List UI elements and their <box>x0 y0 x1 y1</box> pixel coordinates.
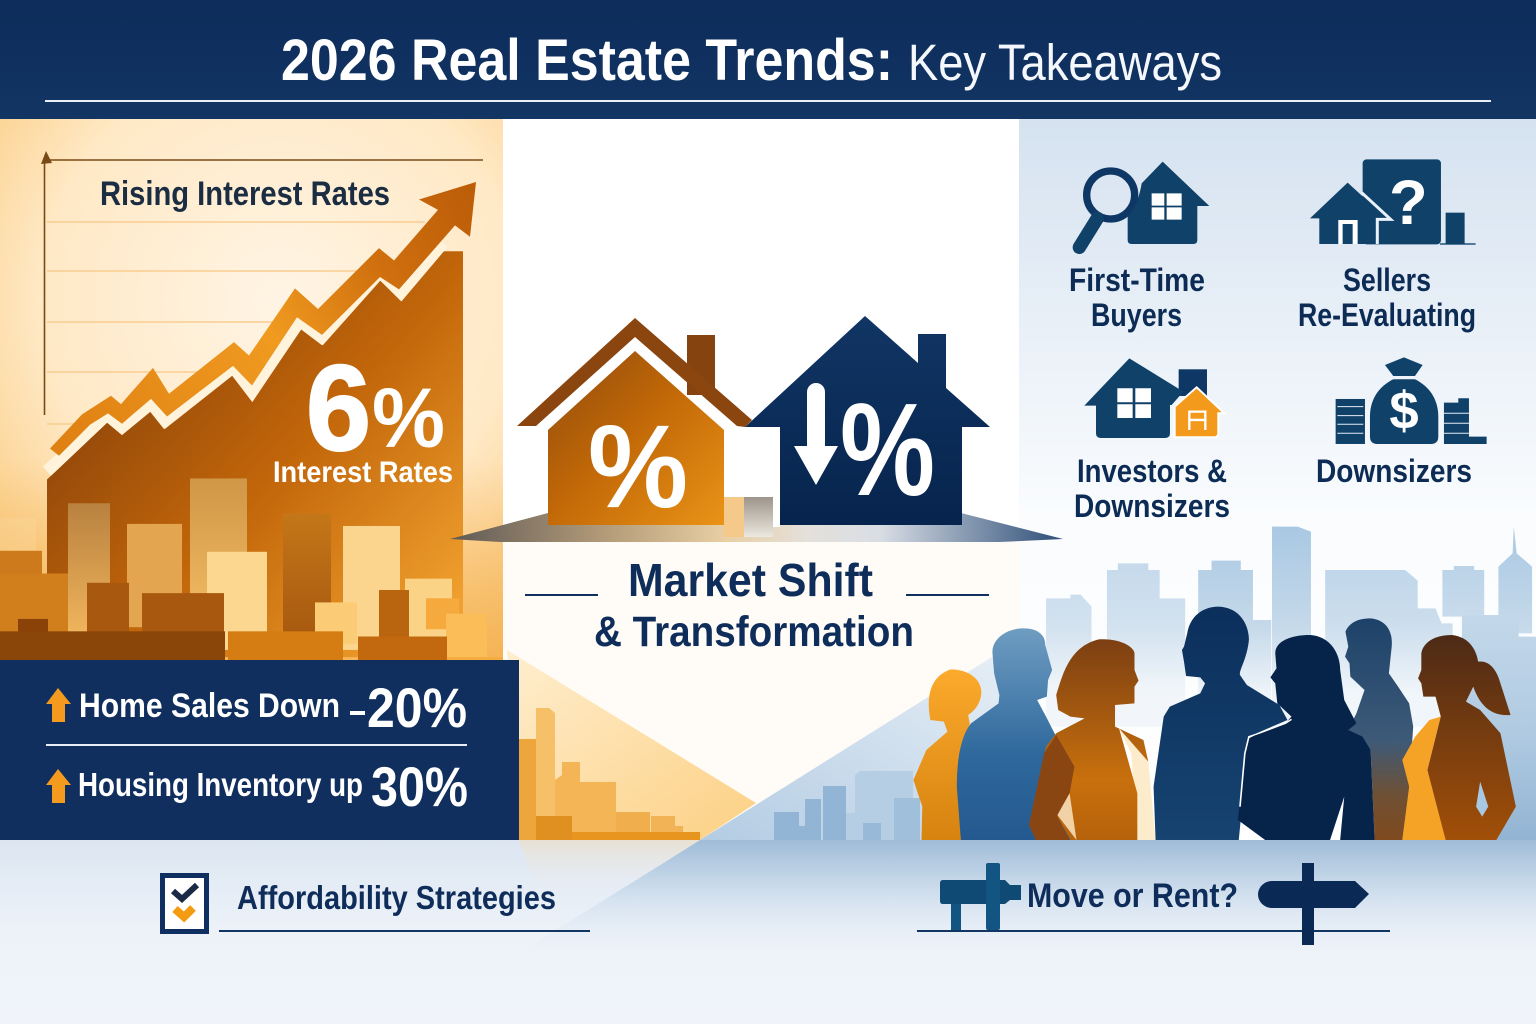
icon: first-time buyers <box>1079 162 1209 247</box>
label: sellers re-evaluating: Re-Evaluating <box>1298 297 1476 333</box>
label: first-time buyers: Buyers <box>1091 297 1182 333</box>
move or rent callout <box>917 863 1390 945</box>
bottom band: warm reflection <box>519 840 700 897</box>
affordability strategies callout: Affordability Strategies <box>237 879 556 916</box>
title text: 2026 Real Estate Trends: <box>281 28 893 93</box>
person: navy woman <box>1238 635 1375 840</box>
house: navy with down arrow and percent <box>745 316 990 525</box>
audience icons and labels <box>1069 159 1487 524</box>
stat: 6% interest rates: % <box>372 371 445 465</box>
heading: market shift and transformation: Market Shift <box>628 554 873 606</box>
person: navy man <box>1154 607 1287 840</box>
affordability strategies callout <box>162 876 590 932</box>
label: first-time buyers <box>1069 262 1205 333</box>
icon: sellers re-evaluating <box>1310 159 1476 245</box>
label: sellers re-evaluating <box>1298 262 1476 333</box>
ground shadow <box>450 513 1063 542</box>
house: orange with percent <box>517 318 752 533</box>
panel: right audience background <box>1019 119 1536 840</box>
heading: market shift and transformation <box>525 554 989 656</box>
subtitle text: Key Takeaways <box>908 34 1222 91</box>
illustration: skyline and people <box>913 527 1536 840</box>
stat row: housing inventory up <box>46 755 468 818</box>
label: investors and downsizers: Downsizers <box>1074 488 1230 524</box>
heading: market shift and transformation: & Transformation <box>594 608 914 656</box>
page background: bottom band <box>0 840 1536 1024</box>
person: woman with ponytail <box>1402 635 1516 840</box>
icon: sellers re-evaluating: ? <box>1389 168 1428 238</box>
person: blue man <box>957 628 1070 840</box>
skyline in chart <box>0 478 503 678</box>
panel: market statistics <box>0 660 519 840</box>
area chart <box>47 251 463 657</box>
small blue skyline <box>774 771 920 840</box>
icon: right signpost <box>1258 863 1369 945</box>
title banner <box>0 0 1536 119</box>
stat row: housing inventory up: 30% <box>371 755 468 818</box>
stat row: home sales down: 20% <box>367 676 467 739</box>
label: downsizers: Downsizers <box>1316 453 1472 489</box>
bottom band: blue haze under people <box>508 840 1536 960</box>
panel: market shift centre background <box>503 119 1019 840</box>
house: orange with percent: % <box>588 401 688 533</box>
icon: checklist <box>162 876 206 932</box>
stat row: home sales down: Home Sales Down <box>79 687 340 725</box>
label: sellers re-evaluating: Sellers <box>1343 262 1431 298</box>
panel: rising interest rates chart <box>0 119 503 678</box>
chart heading: Rising Interest Rates <box>100 175 390 213</box>
stat: 6% interest rates <box>273 340 453 489</box>
stat: 6% interest rates: Interest Rates <box>273 456 453 489</box>
icon: investors and downsizers <box>1084 358 1224 438</box>
stat row: home sales down <box>46 676 467 739</box>
illustration: two houses <box>450 316 1063 542</box>
person: orange silhouette <box>913 669 981 840</box>
rising arrow <box>50 182 476 456</box>
small orange skyline <box>519 708 700 840</box>
chart graphic <box>0 182 503 678</box>
chart axes <box>41 151 483 415</box>
label: investors and downsizers <box>1074 453 1230 524</box>
icon: left signpost <box>940 863 1021 930</box>
down arrow <box>794 383 838 485</box>
house: navy with down arrow and percent: % <box>840 376 935 523</box>
icon: downsizers money bag <box>1336 357 1487 444</box>
move or rent callout: Move or Rent? <box>1027 877 1238 915</box>
person: back man <box>1345 618 1413 840</box>
stat: 6% interest rates: 6 <box>306 340 371 476</box>
person: woman in brown jacket <box>1029 639 1156 840</box>
right skyline <box>1046 527 1536 840</box>
label: first-time buyers: First-Time <box>1069 262 1205 298</box>
stat row: housing inventory up: Housing Inventory up <box>78 766 363 803</box>
label: investors and downsizers: Investors & <box>1077 453 1227 489</box>
icon: downsizers money bag: $ <box>1389 381 1419 440</box>
white highlight line <box>47 243 443 471</box>
